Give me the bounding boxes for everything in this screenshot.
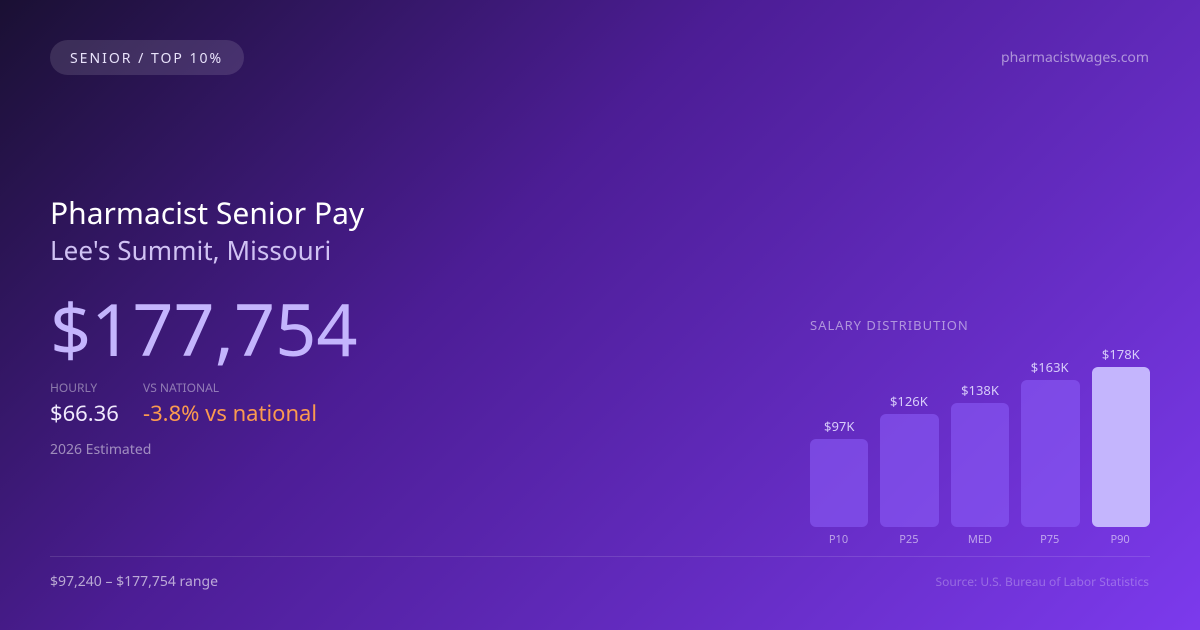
stat: vs national (143, 379, 317, 428)
chart heading: SALARY DISTRIBUTION (810, 316, 969, 334)
stat: vs national: -3.8% vs national (143, 398, 317, 428)
source note: Source: U.S. Bureau of Labor Statistics (936, 573, 1149, 590)
bar: P75: P75 (1040, 532, 1059, 547)
bar: P25: P25 (899, 532, 919, 547)
title: Pharmacist Senior Pay (50, 192, 364, 233)
location subtitle: Lee's Summit, Missouri (50, 232, 331, 268)
stat: hourly: HOURLY (50, 379, 97, 396)
bar: P10 (810, 417, 868, 547)
bar: P25 (880, 392, 939, 547)
chart: salary distribution (810, 316, 1150, 547)
bar: P25: $126K (890, 392, 928, 410)
bar: P90: P90 (1110, 532, 1130, 547)
data year note: 2026 Estimated (50, 440, 151, 459)
main salary figure: $177,754 (50, 280, 358, 378)
bar: P90 (1092, 345, 1150, 547)
bar: P90: $178K (1102, 345, 1140, 363)
bar: P10: $97K (824, 417, 854, 435)
site name: pharmacistwages.com (1001, 48, 1149, 67)
bar: MED (951, 381, 1009, 547)
badge: senior / top 10% (50, 40, 244, 75)
salary range: $97,240 – $177,754 range (50, 572, 218, 591)
badge: senior / top 10%: SENIOR / TOP 10% (70, 49, 223, 68)
bar: P10: P10 (829, 532, 848, 547)
stat: vs national: VS NATIONAL (143, 379, 219, 396)
bar: P75: $163K (1031, 358, 1069, 376)
stat: hourly (50, 379, 119, 428)
bar: P75 (1021, 358, 1080, 547)
stat: hourly: $66.36 (50, 398, 119, 428)
bar: MED: MED (968, 532, 992, 547)
bar: MED: $138K (961, 381, 999, 399)
